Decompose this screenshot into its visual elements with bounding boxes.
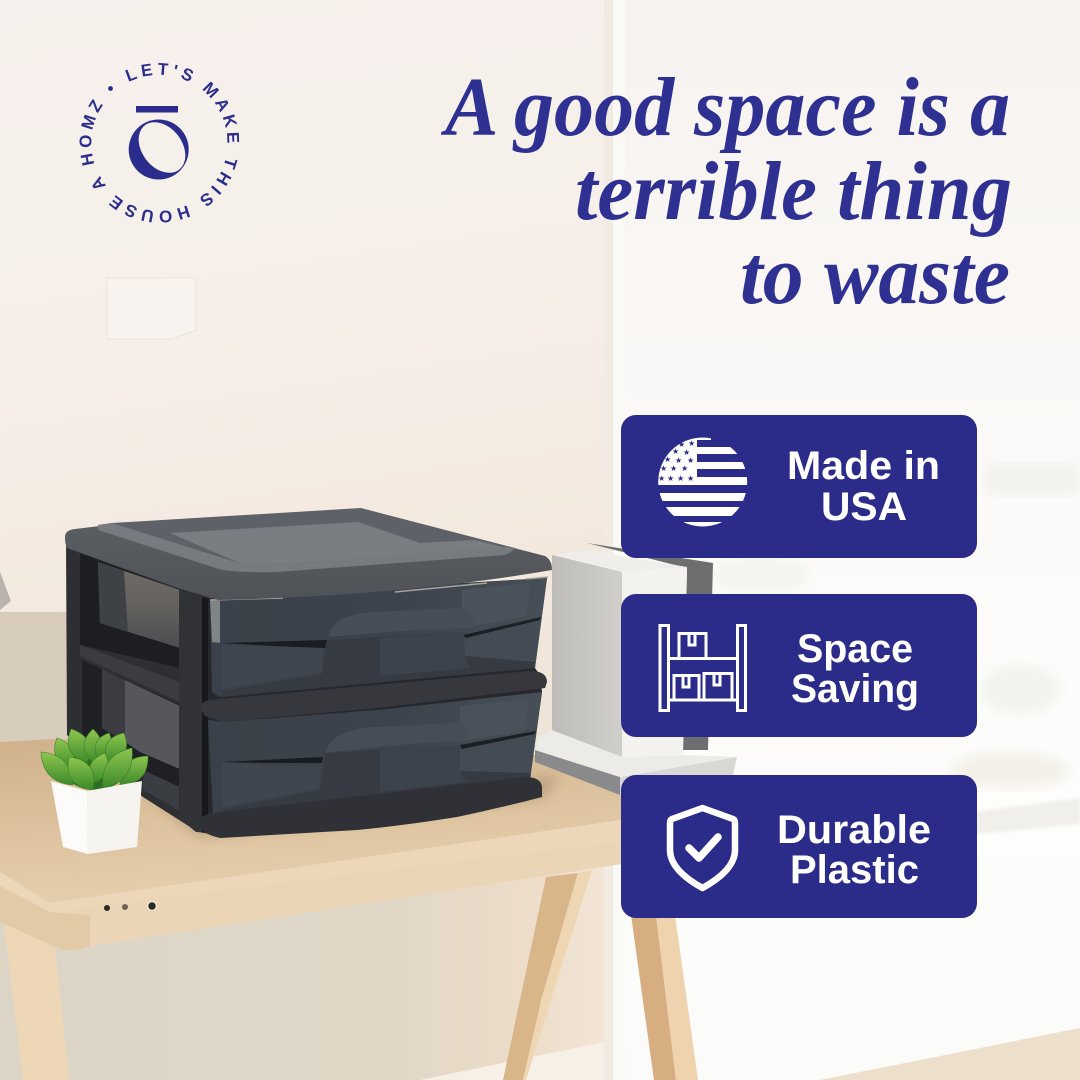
label: Made in USA: Made in [787, 444, 940, 488]
lamp edge at left [0, 572, 11, 610]
icon: USA flag globe: ★ [687, 456, 694, 465]
icon: USA flag globe: ★ [658, 474, 665, 483]
top drawer front panel [222, 645, 323, 689]
label: Durable Plastic: Plastic [790, 848, 919, 892]
feature card: Durable Plastic [621, 775, 977, 918]
desk left leg [4, 922, 69, 1080]
logo ring text: LET'S MAKE THIS HOUSE A HOMZ [80, 62, 240, 222]
middle rail [200, 671, 547, 722]
label: Durable Plastic [777, 808, 931, 892]
icon: USA flag globe: ★ [672, 447, 679, 456]
white book [552, 550, 687, 757]
label: Made in USA [787, 444, 940, 529]
desk top surface [0, 739, 622, 903]
feature card: Made in USA [621, 415, 977, 558]
frame [66, 540, 210, 834]
desk [0, 739, 698, 1080]
upper side recess [80, 553, 180, 668]
logo letter o with macron [129, 106, 195, 182]
label: Space Saving: Space [797, 627, 913, 671]
background: bright window [604, 0, 1080, 1080]
unit shadow on desk [140, 775, 560, 838]
icon: shield with check [670, 808, 735, 888]
headline [440, 61, 1012, 322]
wall note [107, 278, 196, 339]
top drawer [210, 577, 548, 697]
lower drawer pocket [213, 745, 530, 815]
bottom rail [200, 777, 542, 838]
icon: USA flag globe: ★ [670, 464, 677, 473]
icon: USA flag globe: ★ [678, 440, 685, 449]
label: Space Saving: Saving [791, 667, 919, 711]
tray [535, 730, 737, 795]
top drawer handle [328, 608, 475, 637]
icon: USA flag globe: ★ [677, 474, 684, 483]
top drawer right panel [465, 620, 540, 660]
plant pot [51, 781, 142, 854]
dark book [587, 543, 713, 750]
headline: to waste [740, 229, 1010, 322]
lower drawer handle [325, 723, 468, 753]
side rail [80, 645, 180, 702]
lower drawer right panel [460, 733, 535, 772]
desk front edge [0, 820, 622, 912]
desk holes [104, 902, 156, 911]
headline: terrible thing [575, 145, 1012, 238]
top cap [65, 526, 552, 600]
desk right front leg [631, 915, 698, 1080]
icon: USA flag globe: ★ [688, 439, 695, 448]
lower side recess [82, 660, 180, 800]
books on tray [535, 543, 737, 795]
lower drawer shadow lines [222, 757, 323, 763]
storage drawer unit [65, 508, 552, 838]
drawer backing [208, 578, 547, 834]
icon: shelf with boxes [660, 626, 746, 710]
desk apron [0, 841, 622, 950]
logo dot [108, 86, 113, 91]
side window lower [102, 669, 182, 812]
grey book cover [552, 555, 622, 757]
label: Made in USA: USA [821, 485, 907, 529]
lower drawer [208, 692, 542, 815]
icon: USA flag globe: ★ [660, 464, 667, 473]
icon: USA flag globe [655, 437, 751, 528]
top drawer shadow lines [222, 640, 327, 648]
icon: USA flag globe: ★ [687, 474, 694, 483]
desk right rear leg [503, 870, 592, 1080]
side window upper [98, 562, 180, 648]
plant leaves [41, 729, 148, 790]
icon: USA flag globe: ★ [675, 456, 682, 465]
icon: USA flag globe: ★ [683, 448, 690, 457]
icon: USA flag globe: ★ [681, 464, 688, 473]
label: Durable Plastic: Durable [777, 808, 931, 852]
lid inner [170, 522, 506, 564]
centre post [179, 590, 202, 832]
headline: A good space is a [440, 61, 1010, 154]
icon: USA flag globe: ★ [667, 474, 674, 483]
top drawer pocket [220, 632, 535, 697]
potted plant [41, 729, 148, 854]
icon: USA flag globe: ★ [664, 455, 671, 464]
logo [80, 62, 240, 222]
plant heart [65, 750, 125, 790]
lid tray [98, 508, 515, 572]
lower drawer front panel [222, 763, 320, 807]
label: Space Saving [791, 627, 919, 711]
feature card: Space Saving [621, 594, 977, 737]
lid near rim [98, 523, 515, 572]
